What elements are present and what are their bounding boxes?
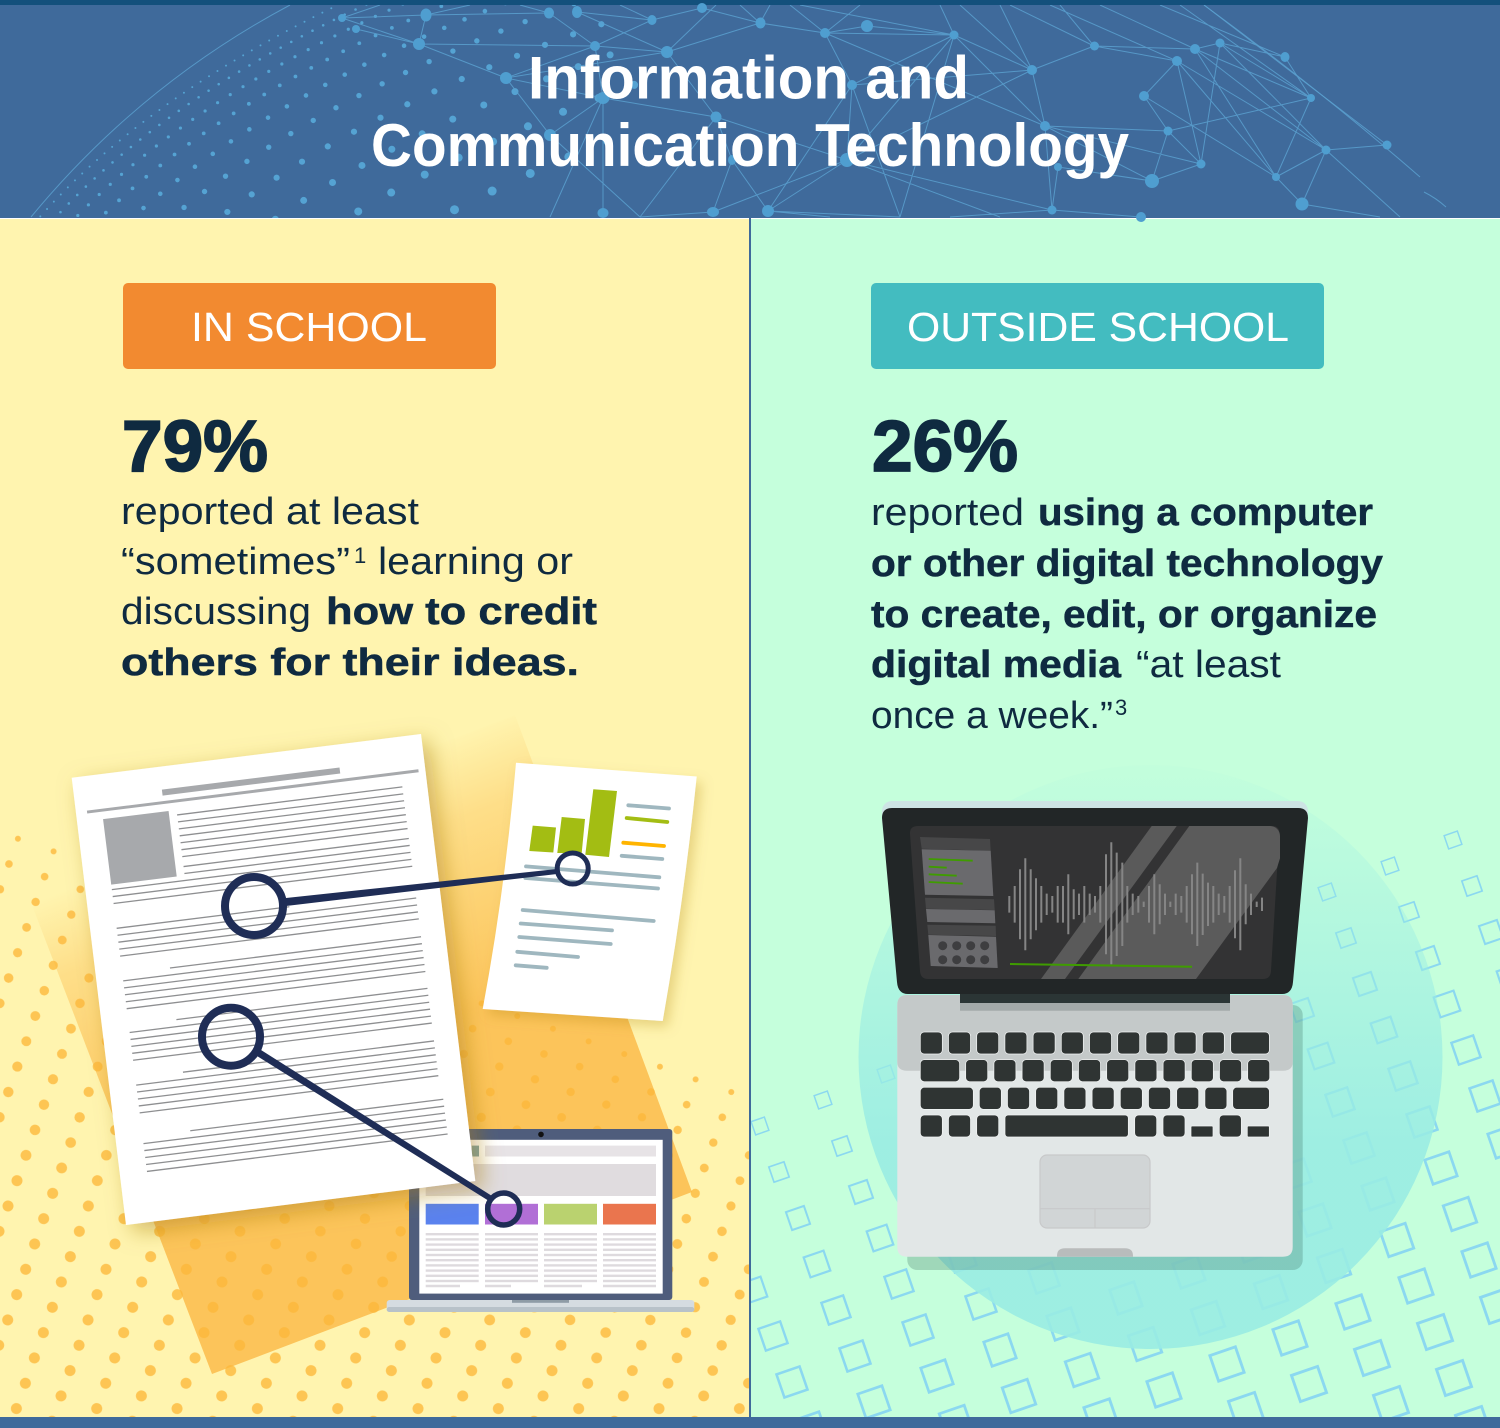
connector: document to chart bbox=[225, 853, 588, 935]
stat text: outside school bbox=[871, 492, 1383, 737]
heading badge: outside school bbox=[871, 283, 1324, 369]
heading badge: in school: IN SCHOOL bbox=[191, 304, 427, 350]
laptop lid bbox=[882, 801, 1308, 994]
icon: web page laptop bbox=[387, 1129, 694, 1312]
stat text: outside school: or other digital technology bbox=[871, 543, 1383, 585]
teal circle backdrop bbox=[858, 826, 1442, 1349]
title bbox=[371, 44, 1130, 179]
panel: in school background bbox=[0, 219, 749, 1417]
stat text: outside school: reported bbox=[871, 492, 1024, 534]
stat text: in school: “sometimes” bbox=[121, 541, 350, 583]
illustration: outside school bbox=[741, 765, 1500, 1428]
icon: chart paper bbox=[483, 763, 697, 1021]
icon: text document bbox=[72, 734, 475, 1225]
stat text: outside school: “at least bbox=[1136, 644, 1281, 686]
stat text: in school: how to credit bbox=[326, 591, 597, 633]
stat text: in school: discussing bbox=[121, 591, 311, 633]
title: Communication Technology bbox=[371, 112, 1130, 179]
trackpad bbox=[1040, 1155, 1150, 1228]
laptop base bbox=[897, 994, 1293, 1257]
connector: document to laptop bbox=[202, 1008, 520, 1225]
stat text: outside school: once a week.” bbox=[871, 695, 1113, 737]
panel divider bbox=[749, 218, 751, 1418]
stat text: outside school: 3 bbox=[1115, 695, 1127, 720]
panel: outside school background bbox=[751, 219, 1500, 1417]
dot pattern bbox=[0, 820, 749, 1417]
keyboard bbox=[920, 1032, 1270, 1137]
stat text: in school: learning or bbox=[378, 541, 573, 583]
stat text: in school bbox=[121, 491, 597, 684]
stat text: in school: others for their ideas. bbox=[121, 642, 579, 684]
header banner with globe network bbox=[0, 0, 1500, 222]
stat text: in school: reported at least bbox=[121, 491, 419, 533]
stat: 26%: 26% bbox=[872, 407, 1018, 487]
laptop shadow bbox=[907, 1005, 1303, 1270]
illustration: in school bbox=[0, 715, 749, 1417]
stat text: outside school: using a computer bbox=[1038, 492, 1373, 534]
heading badge: in school bbox=[123, 283, 496, 369]
stat text: outside school: to create, edit, or organize bbox=[871, 594, 1377, 636]
title: Information and bbox=[528, 44, 969, 112]
stat: 79%: 79% bbox=[122, 407, 268, 487]
heading badge: outside school: OUTSIDE SCHOOL bbox=[907, 304, 1289, 350]
front notch bbox=[1057, 1248, 1133, 1257]
bottom band bbox=[0, 1417, 1500, 1428]
stat text: outside school: digital media bbox=[871, 644, 1122, 686]
orange backdrop bbox=[30, 715, 692, 1374]
stat text: in school: 1 bbox=[354, 543, 366, 568]
square pattern bbox=[741, 831, 1500, 1428]
icon: open laptop bbox=[882, 801, 1308, 1270]
